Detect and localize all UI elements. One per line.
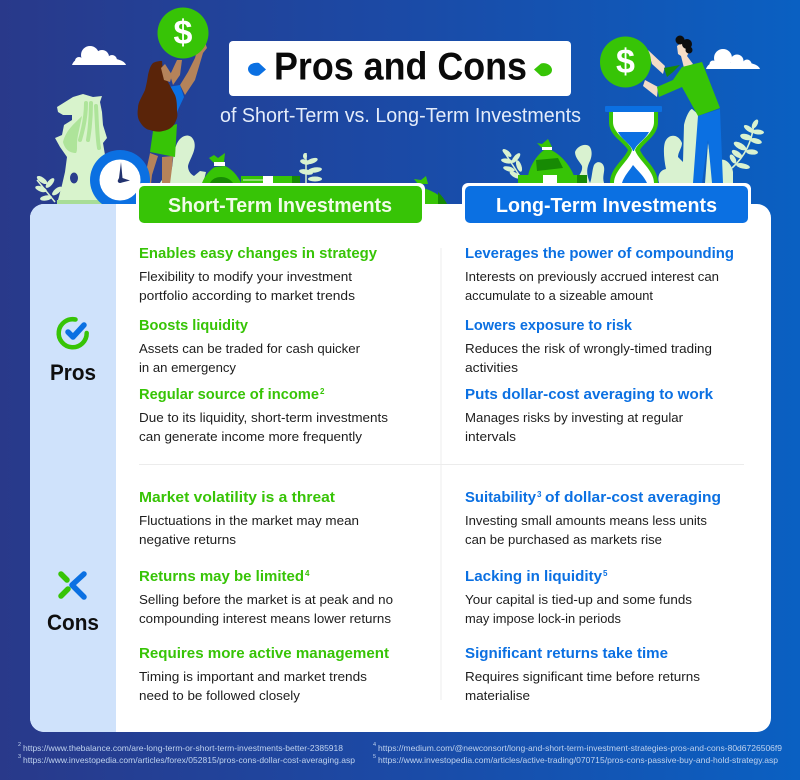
illustration: right plants (658, 109, 733, 183)
long-term pro 3: Manages risks by investing at regular (465, 410, 684, 425)
illustration: centre fern (299, 153, 322, 183)
long-term pro 1: Interests on previously accrued interest can (465, 269, 719, 284)
footnotes: left: https://www.thebalance.com/are-long-term-or-short-term-investments-better-2385918 (23, 743, 343, 753)
short-term con 3: Requires more active management (139, 645, 389, 662)
header: long-term: Long-Term Investments (496, 195, 717, 217)
short-term con 1: negative returns (139, 532, 237, 547)
footnotes: left: 3 (18, 754, 21, 760)
short-term con 1: Fluctuations in the market may mean (139, 513, 359, 528)
small bag peeking behind header (414, 176, 447, 204)
short-term con 2: Returns may be limited (139, 568, 304, 585)
long-term con 3: Requires significant time before returns (465, 669, 701, 684)
long-term con 1: of dollar-cost averaging (545, 489, 721, 506)
long-term con 1 (465, 489, 721, 547)
illustration: woman reaching for coin (138, 42, 207, 184)
illustration: hourglass (605, 106, 662, 183)
long-term con 2: 5 (603, 569, 608, 578)
long-term pro 2: activities (465, 360, 519, 375)
short-term con 3: need to be followed closely (139, 688, 301, 703)
illustration: man holding coin (643, 36, 723, 183)
short-term pro 3: Regular source of income (139, 386, 319, 403)
long-term pro 3: intervals (465, 429, 517, 444)
short-term con 2: Selling before the market is at peak and no (139, 592, 393, 607)
illustration: right dollar coin (600, 36, 651, 88)
short-term pro 1 (139, 245, 378, 303)
illustration: right fern near bag (501, 148, 523, 180)
illustration: left fern (34, 174, 63, 202)
long-term pro 2: Reduces the risk of wrongly-timed trading (465, 341, 712, 356)
long-term con 1: 3 (537, 490, 542, 499)
header: long-term (462, 183, 751, 225)
header: short-term: Short-Term Investments (168, 195, 392, 217)
short-term pro 3: Due to its liquidity, short-term investments (139, 410, 389, 425)
long-term pro 2 (465, 317, 712, 375)
illustration: right cloud (706, 49, 760, 69)
row label: cons (47, 574, 99, 635)
footnotes: left (18, 742, 355, 765)
footnotes: right: https://www.investopedia.com/articles/active-trading/070715/pros-cons-passive-buy-and-hold-strategy.asp (378, 755, 778, 765)
short-term pro 3: 2 (320, 387, 325, 396)
long-term con 3: materialise (465, 688, 530, 703)
footnotes: right: 5 (373, 754, 376, 760)
long-term pro 1: accumulate to a sizeable amount (465, 288, 653, 303)
illustration: right money bag (518, 139, 604, 183)
title box (229, 41, 571, 96)
short-term pro 3: can generate income more frequently (139, 429, 363, 444)
long-term pro 3: Puts dollar-cost averaging to work (465, 386, 714, 403)
footnotes: right (373, 742, 782, 765)
illustration: left money bag and banknote (202, 153, 300, 183)
short-term pro 1: Enables easy changes in strategy (139, 245, 378, 262)
short-term con 3 (139, 645, 389, 703)
illustration: right dollar coin: $ (616, 43, 635, 81)
long-term pro 2: Lowers exposure to risk (465, 317, 633, 334)
illustration: left plant (160, 136, 207, 184)
icon: check circle (59, 319, 87, 347)
illustration: clock (90, 150, 150, 210)
long-term pro 1: Leverages the power of compounding (465, 245, 734, 262)
main panel (30, 204, 771, 732)
long-term con 2: Your capital is tied-up and some funds (465, 592, 693, 607)
left column (30, 204, 116, 732)
row label: cons: Cons (47, 610, 99, 635)
footnotes: right: https://medium.com/@newconsort/long-and-short-term-investment-strategies-pros-and-cons-80d6726506f9 (378, 743, 782, 753)
long-term pro 3 (465, 386, 714, 444)
long-term con 3 (465, 645, 701, 703)
illustration: left cloud (72, 46, 126, 65)
long-term con 2: may impose lock-in periods (465, 611, 621, 626)
illustration: left dollar coin (158, 8, 208, 58)
long-term pro 1 (465, 245, 734, 303)
subtitle: of Short-Term vs. Long-Term Investments (220, 104, 581, 127)
short-term pro 2: Boosts liquidity (139, 317, 249, 334)
footnotes: right: 4 (373, 742, 376, 748)
footnotes: left: https://www.investopedia.com/articles/forex/052815/pros-cons-dollar-cost-averaging.asp (23, 755, 355, 765)
short-term con 2: compounding interest means lower returns (139, 611, 392, 626)
illustration: merlion statue (55, 94, 112, 204)
footnotes: left: 2 (18, 742, 21, 748)
illustration: right fern (728, 118, 764, 170)
short-term pro 2: in an emergency (139, 360, 236, 375)
long-term con 2 (465, 568, 693, 626)
short-term pro 1: portfolio according to market trends (139, 288, 356, 303)
icon: green drop (534, 63, 552, 76)
icon: blue drop (248, 63, 266, 76)
short-term pro 2 (139, 317, 361, 375)
long-term con 1: can be purchased as markets rise (465, 532, 662, 547)
long-term con 3: Significant returns take time (465, 645, 668, 662)
short-term con 2: 4 (305, 569, 310, 578)
long-term con 2: Lacking in liquidity (465, 568, 603, 585)
short-term pro 3 (139, 386, 389, 444)
row label: pros: Pros (50, 360, 96, 385)
short-term con 1: Market volatility is a threat (139, 489, 335, 506)
short-term pro 2: Assets can be traded for cash quicker (139, 341, 361, 356)
short-term con 1 (139, 489, 359, 547)
row label: pros (50, 319, 96, 385)
short-term con 2 (139, 568, 393, 626)
short-term pro 1: Flexibility to modify your investment (139, 269, 352, 284)
header: short-term (136, 183, 425, 225)
short-term con 3: Timing is important and market trends (139, 669, 368, 684)
long-term con 1: Suitability (465, 489, 537, 506)
illustration: left dollar coin: $ (174, 14, 193, 52)
long-term con 1: Investing small amounts means less units (465, 513, 707, 528)
icon: cross (61, 574, 84, 597)
title text: Pros and Cons (274, 46, 527, 88)
